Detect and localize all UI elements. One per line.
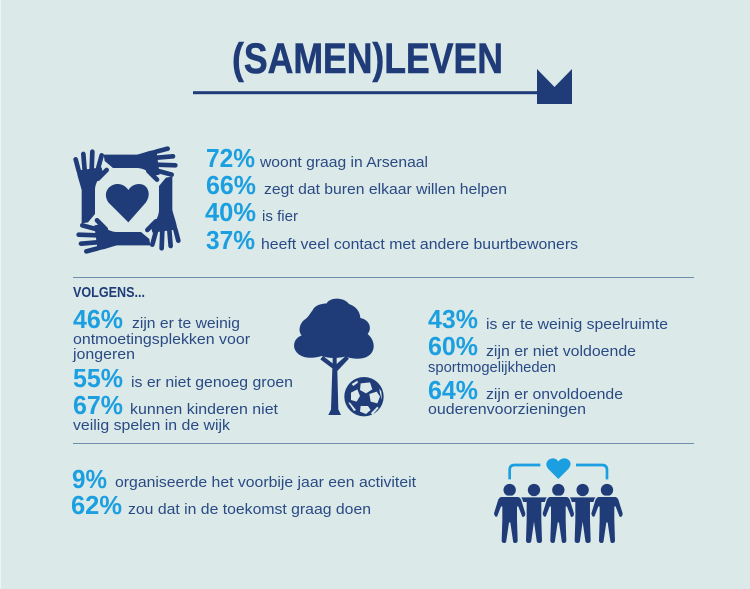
stats: right column: ouderenvoorzieningen xyxy=(428,401,586,418)
stats: right column: 64% xyxy=(428,375,478,405)
stats: top group: 40% xyxy=(205,197,256,227)
title: (SAMEN)LEVEN xyxy=(232,35,503,83)
stats: right column: zijn er niet voldoende xyxy=(486,343,636,360)
heart and brackets xyxy=(510,458,607,479)
stats: bottom group: 9% xyxy=(72,464,107,494)
stats: left column: veilig spelen in de wijk xyxy=(73,417,231,434)
five people xyxy=(493,484,623,544)
stats: right column: 60% xyxy=(428,331,478,361)
stats: bottom group: organiseerde het voorbije jaar een activiteit xyxy=(115,474,417,491)
stats: top group xyxy=(205,143,578,255)
stats: top group: 37% xyxy=(206,225,255,255)
stats: left column: 67% xyxy=(73,390,123,420)
stats: left column: 46% xyxy=(73,304,123,334)
stats: top group: heeft veel contact met andere buurtbewoners xyxy=(261,236,578,253)
stats: left column: zijn er te weinig xyxy=(132,315,240,332)
title arrow line with marker xyxy=(193,69,572,104)
stats: left column: kunnen kinderen niet xyxy=(130,401,279,418)
stats: left column: jongeren xyxy=(72,346,135,363)
stats: right column: sportmogelijkheden xyxy=(428,359,556,376)
stats: left column: ontmoetingsplekken voor xyxy=(73,331,250,348)
stats: bottom group: 62% xyxy=(71,490,122,520)
tree trunk xyxy=(320,355,349,415)
stats: left column: 55% xyxy=(73,363,123,393)
stats: right column: zijn er onvoldoende xyxy=(486,386,623,403)
icon: tree and football xyxy=(294,299,384,416)
stats: bottom group: zou dat in de toekomst graag doen xyxy=(128,501,371,518)
stats: right column xyxy=(428,304,668,418)
tree crown xyxy=(294,299,374,359)
stats: bottom group xyxy=(71,464,417,520)
stats: left column: is er niet genoeg groen xyxy=(131,374,293,391)
stats: top group: is fier xyxy=(262,208,298,225)
stats: top group: woont graag in Arsenaal xyxy=(259,154,428,171)
stats: top group: zegt dat buren elkaar willen helpen xyxy=(264,181,507,198)
stats: left column xyxy=(72,304,293,434)
icon: people with heart xyxy=(493,458,623,544)
icon: four hands around a heart xyxy=(76,149,178,251)
stats: top group: 66% xyxy=(206,170,256,200)
stats: right column: is er te weinig speelruimte xyxy=(486,316,668,333)
stats: top group: 72% xyxy=(206,143,255,173)
heading: volgens: VOLGENS... xyxy=(73,284,145,301)
football xyxy=(344,377,384,416)
stats: right column: 43% xyxy=(428,304,478,334)
